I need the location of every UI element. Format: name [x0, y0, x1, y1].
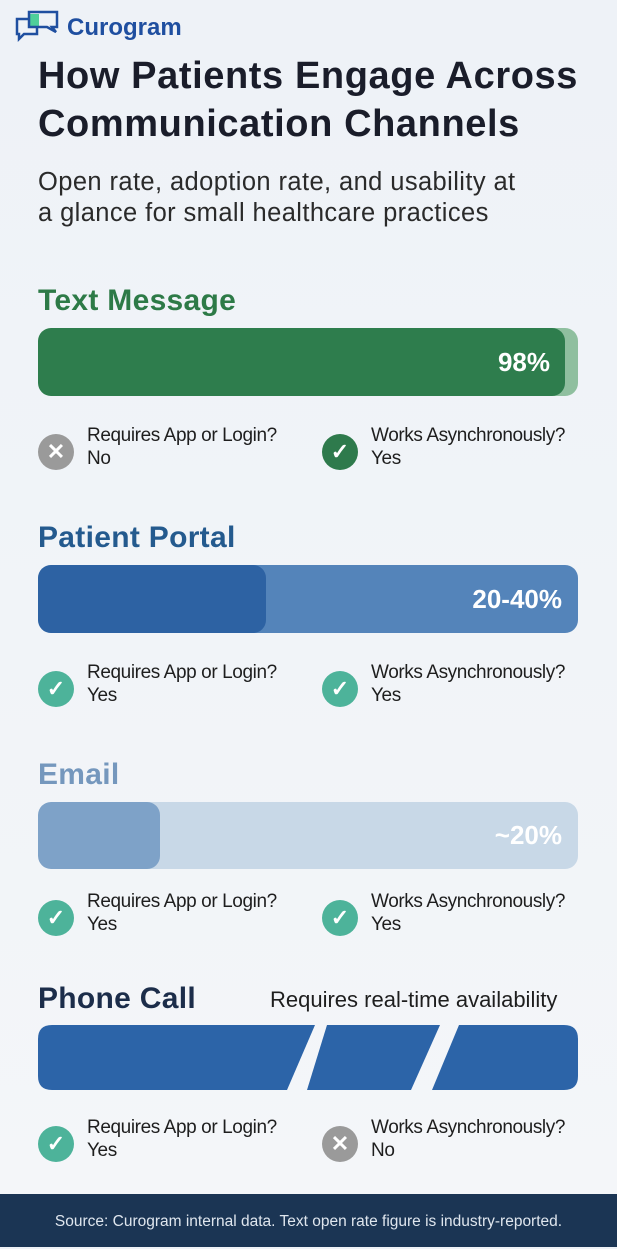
heading: Phone Call: Phone Call: [38, 982, 196, 1015]
row: patient portal features: ✓: [47, 676, 65, 701]
bar: email ~20%: ~20%: [495, 820, 562, 850]
title: How Patients Engage Across: [38, 55, 578, 97]
row: text message features: Works Asynchronously?: [371, 425, 565, 446]
row: email features: ✓: [47, 905, 65, 930]
heading: Email: Email: [38, 758, 120, 791]
logo: Curogram: [67, 14, 182, 41]
footer: source: Source: Curogram internal data. Text open rate figure is industry-reported.: [55, 1213, 562, 1230]
row: text message features: No: [87, 448, 110, 469]
row: phone call features: Works Asynchronously?: [371, 1117, 565, 1138]
heading: Patient Portal: Patient Portal: [38, 521, 236, 554]
row: email features: Yes: [87, 914, 117, 935]
row: email features: Yes: [371, 914, 401, 935]
row: email features: ✓: [331, 905, 349, 930]
row: phone call features: ✕: [331, 1131, 349, 1156]
row: text message features: Yes: [371, 448, 401, 469]
row: phone call features: Yes: [87, 1140, 117, 1161]
bar: text message 98%: [38, 328, 578, 396]
row: patient portal features: Yes: [87, 685, 117, 706]
row: email features: [38, 891, 565, 936]
row: text message features: ✕: [47, 439, 65, 464]
subtitle: a glance for small healthcare practices: [38, 199, 489, 227]
row: email features: Works Asynchronously?: [371, 891, 565, 912]
bar: phone call broken bar: [38, 1025, 578, 1090]
footer: source: [0, 1194, 617, 1247]
title: Communication Channels: [38, 103, 520, 145]
row: patient portal features: Requires App or Login?: [87, 662, 277, 683]
row: phone call features: ✓: [47, 1131, 65, 1156]
row: patient portal features: Works Asynchronously?: [371, 662, 565, 683]
subtitle: Open rate, adoption rate, and usability at: [38, 168, 516, 196]
bar: patient portal 20-40%: [38, 565, 578, 633]
title: [38, 55, 578, 145]
row: text message features: [38, 425, 565, 470]
heading: Text Message: Text Message: [38, 284, 236, 317]
note: real-time: Requires real-time availability: [270, 987, 557, 1012]
row: patient portal features: ✓: [331, 676, 349, 701]
row: phone call features: No: [371, 1140, 394, 1161]
bar: email ~20%: [38, 802, 578, 869]
subtitle: [38, 168, 516, 227]
logo: [16, 10, 182, 42]
row: text message features: Requires App or Login?: [87, 425, 277, 446]
row: email features: Requires App or Login?: [87, 891, 277, 912]
bar: patient portal 20-40%: 20-40%: [472, 584, 562, 614]
row: phone call features: [38, 1117, 565, 1162]
row: phone call features: Requires App or Login?: [87, 1117, 277, 1138]
row: text message features: ✓: [331, 439, 349, 464]
bar: text message 98%: 98%: [498, 347, 550, 377]
row: patient portal features: [38, 662, 565, 707]
row: patient portal features: Yes: [371, 685, 401, 706]
